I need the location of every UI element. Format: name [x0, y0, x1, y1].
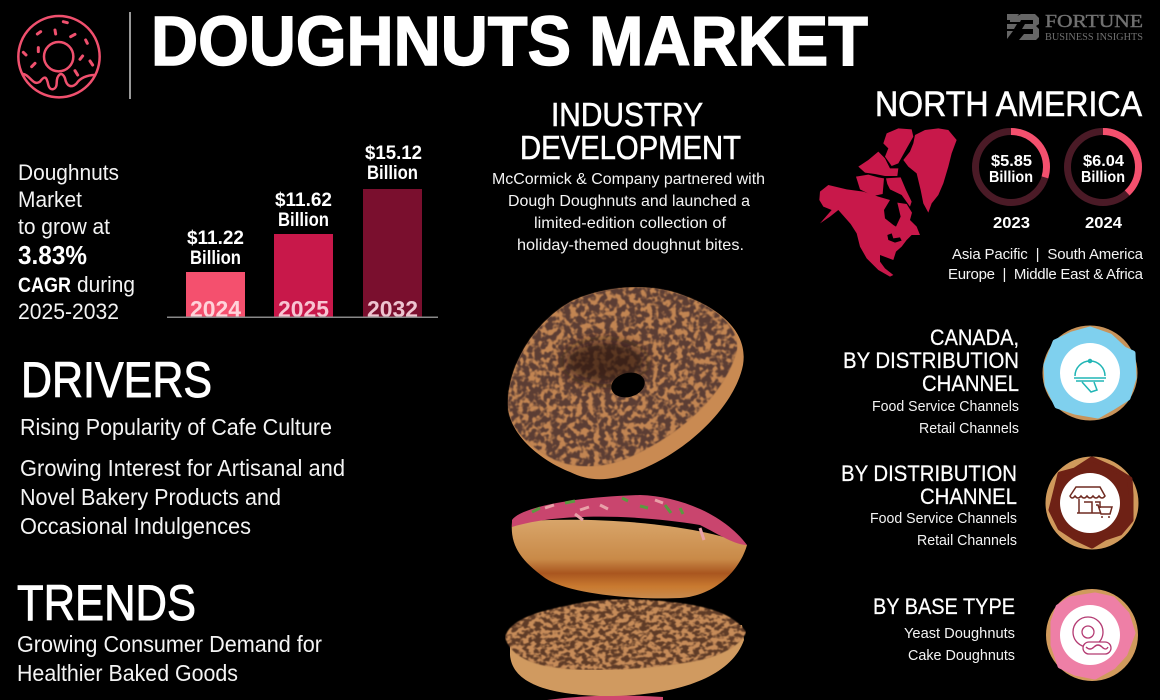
industry development text: limited-edition collection of — [534, 215, 727, 232]
segment: Canada by distribution channel: Retail Channels — [919, 420, 1019, 437]
segment: Canada by distribution channel: CANADA, — [930, 325, 1019, 350]
doughnut stack photo — [505, 287, 747, 700]
bar chart: 2025 — [278, 296, 329, 322]
bar chart — [167, 143, 438, 322]
bar chart: Billion — [367, 163, 418, 184]
growth text block: 2025-2032 — [18, 299, 119, 324]
segment: by base type: BY BASE TYPE — [873, 594, 1015, 619]
middle doughnut — [512, 495, 747, 598]
other regions — [948, 246, 1144, 283]
bar chart: Billion — [190, 248, 241, 269]
heading: industry development: DEVELOPMENT — [520, 129, 741, 166]
bar chart: Billion — [278, 210, 329, 231]
growth text block: during — [77, 272, 135, 297]
segment: Canada by distribution channel: Food Service Channels — [872, 398, 1019, 415]
bar chart: $15.12 — [365, 143, 422, 164]
chart: 2023 ring: $5.85 — [991, 153, 1032, 170]
other regions: Asia Pacific | South America — [952, 246, 1144, 263]
heading: north america: NORTH AMERICA — [875, 85, 1143, 124]
chart: 2024 ring — [1068, 132, 1138, 232]
chart: 2023 ring: Billion — [989, 169, 1033, 186]
industry development text: McCormick & Company partnered with — [492, 171, 765, 188]
growth text block: 3.83% — [18, 240, 87, 270]
industry development text: Dough Doughnuts and launched a — [508, 193, 750, 210]
segment: by distribution channel: Retail Channels — [917, 532, 1017, 549]
growth text block: CAGR — [18, 274, 71, 297]
chart: 2024 ring: Billion — [1081, 169, 1125, 186]
heading: industry development — [520, 96, 741, 166]
segment: Canada by distribution channel — [843, 325, 1019, 437]
drivers text: Novel Bakery Products and — [20, 484, 281, 510]
logo: Fortune Business Insights — [1007, 11, 1143, 43]
drivers text: Growing Interest for Artisanal and — [20, 455, 345, 481]
chart: 2024 ring: $6.04 — [1083, 153, 1124, 170]
drivers text — [20, 414, 345, 539]
trends text — [17, 631, 322, 686]
industry development text — [492, 171, 765, 254]
icon: doughnut logo — [18, 16, 100, 97]
other regions: Europe | Middle East & Africa — [948, 266, 1144, 283]
segment: by base type: Cake Doughnuts — [908, 647, 1015, 664]
drivers text: Rising Popularity of Cafe Culture — [20, 414, 332, 440]
icon: pink doughnut with doughnut line art — [1046, 589, 1138, 681]
bar chart: $11.62 — [275, 190, 332, 211]
segment: by distribution channel: Food Service Channels — [870, 510, 1017, 527]
icon: blue doughnut with food service cloche — [1042, 326, 1138, 420]
growth text block: to grow at — [18, 214, 110, 239]
drivers text: Occasional Indulgences — [20, 513, 251, 539]
chart: 2024 ring: 2024 — [1085, 215, 1122, 232]
logo: Fortune Business Insights: FORTUNE — [1045, 11, 1143, 31]
segment: by distribution channel: CHANNEL — [920, 484, 1017, 509]
chart: 2023 ring: 2023 — [993, 215, 1030, 232]
bottom doughnut — [505, 599, 746, 696]
divider — [129, 12, 131, 99]
chart: 2023 ring — [976, 132, 1046, 232]
segment: by distribution channel: BY DISTRIBUTION — [841, 461, 1017, 486]
trends text: Healthier Baked Goods — [17, 660, 238, 686]
bar chart: 2032 — [367, 296, 418, 322]
bottom pink doughnut peek — [547, 696, 663, 700]
segment: by base type: Yeast Doughnuts — [904, 625, 1015, 642]
bar chart: $11.22 — [187, 228, 244, 249]
segment: Canada by distribution channel: BY DISTRIBUTION — [843, 348, 1019, 373]
segment: Canada by distribution channel: CHANNEL — [922, 371, 1019, 396]
icon: chocolate doughnut with store — [1046, 456, 1138, 550]
heading: trends: TRENDS — [17, 575, 196, 631]
segment: by distribution channel — [841, 461, 1017, 549]
title: DOUGHNUTS MARKET — [151, 2, 868, 80]
industry development text: holiday-themed doughnut bites. — [517, 237, 744, 254]
top doughnut — [508, 287, 744, 479]
segment: by base type — [873, 594, 1015, 664]
bar chart: 2024 — [190, 296, 241, 322]
logo: Fortune Business Insights: BUSINESS INSIGHTS — [1045, 32, 1143, 43]
heading: industry development: INDUSTRY — [551, 96, 703, 133]
growth text block: Market — [18, 187, 82, 212]
growth text block — [18, 160, 135, 324]
heading: drivers: DRIVERS — [21, 352, 212, 408]
trends text: Growing Consumer Demand for — [17, 631, 322, 657]
growth text block: Doughnuts — [18, 160, 119, 185]
map: north america — [819, 128, 957, 277]
